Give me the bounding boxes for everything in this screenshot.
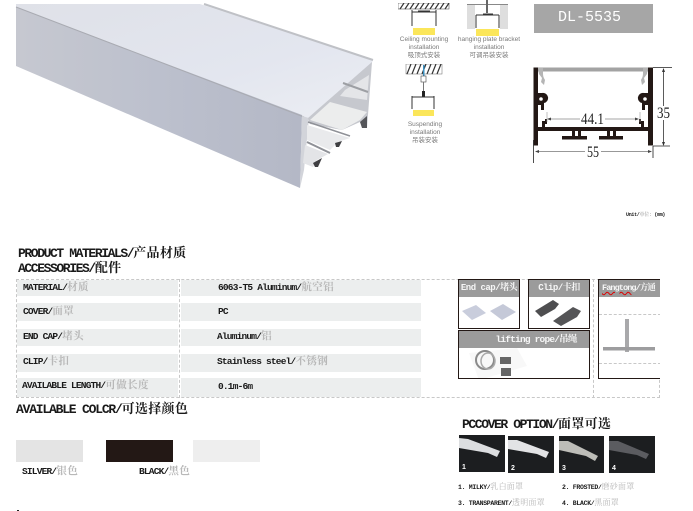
model number badge bbox=[534, 4, 653, 33]
unit note: Unit/单位: (mm) bbox=[626, 212, 665, 218]
accessory: end cap: End cap/堵头 bbox=[461, 283, 517, 293]
swatch: white bbox=[193, 440, 260, 462]
divider between table and accessories bbox=[593, 279, 594, 398]
cover option 3 bbox=[559, 436, 604, 473]
caption: hanging plate bracket installation: installation bbox=[474, 44, 504, 51]
cover option 1 bbox=[459, 435, 505, 472]
row value: cover: PC bbox=[218, 306, 228, 317]
cover option 3: 3 bbox=[562, 465, 566, 472]
heading: accessories: ACCESSORIES/配件 bbox=[18, 261, 121, 276]
icon: suspending installation diagram bbox=[406, 64, 442, 116]
heading: available colour: AVAILABLE COLCR/可选择颜色 bbox=[16, 402, 188, 417]
cover option 1: 1 bbox=[462, 464, 466, 471]
icon: hanging plate bracket diagram bbox=[467, 0, 508, 36]
stray mark bbox=[17, 510, 19, 511]
caption: hanging plate bracket installation: hanging plate bracket bbox=[458, 36, 520, 43]
cross-section dimension drawing: 44.1 bbox=[581, 111, 604, 128]
cover option 4 bbox=[609, 436, 655, 473]
accessory: fangtong bbox=[598, 279, 660, 379]
accessory: clip bbox=[528, 279, 590, 329]
model number badge: DL-5535 bbox=[558, 9, 621, 26]
accessory: fangtong: Fangtong/方通 bbox=[602, 283, 655, 293]
cross-section dimension drawing: 35 bbox=[657, 105, 670, 122]
label: silver: SILVER/银色 bbox=[22, 466, 78, 478]
caption: hanging plate bracket installation bbox=[458, 36, 520, 59]
specification table bbox=[16, 279, 660, 398]
accessory: lifting rope: lifting rope/吊绳 bbox=[495, 334, 577, 345]
row value: available length: 0.1m-6m bbox=[218, 381, 252, 392]
cover option 2: 2 bbox=[511, 465, 515, 472]
label: frosted: 2. FROSTED/磨砂面罩 bbox=[562, 483, 634, 492]
swatch: silver bbox=[16, 440, 83, 462]
cross-section dimension drawing: 55 bbox=[587, 144, 599, 161]
row: material: MATERIAL/材质 bbox=[23, 282, 89, 294]
row: clip: CLIP/卡扣 bbox=[23, 356, 69, 368]
caption: hanging plate bracket installation: 可调吊装安装 bbox=[470, 52, 508, 59]
label: milky: 1. MILKY/乳白面罩 bbox=[458, 483, 523, 492]
accessory: clip: Clip/卡扣 bbox=[538, 283, 580, 293]
accessory: end cap bbox=[458, 279, 520, 329]
row: cover: COVER/面罩 bbox=[23, 306, 74, 318]
caption: ceiling mounting installation: installation bbox=[409, 44, 439, 51]
cross-section dimension drawing bbox=[533, 67, 672, 163]
cover option 4: 4 bbox=[612, 465, 616, 472]
row value: material: 6063-T5 Aluminum/航空铝 bbox=[218, 282, 334, 294]
swatch: black bbox=[106, 440, 173, 462]
caption: suspending installation: 吊装安装 bbox=[412, 137, 438, 144]
caption: suspending installation: Suspending bbox=[408, 121, 442, 128]
label: transparent: 3. TRANSPARENT/透明面罩 bbox=[458, 499, 545, 508]
label: black: BLACK/黑色 bbox=[139, 466, 190, 478]
row: end cap: END CAP/堵头 bbox=[23, 331, 84, 343]
caption: suspending installation: installation bbox=[410, 129, 440, 136]
row value: clip: Stainless steel/不锈钢 bbox=[217, 356, 328, 368]
caption: suspending installation bbox=[408, 121, 442, 144]
row: available length: AVAILABLE LENGTH/可做长度 bbox=[22, 380, 149, 392]
row value: end cap: Aluminum/铝 bbox=[217, 331, 272, 343]
caption: ceiling mounting installation: Ceiling mounting bbox=[400, 36, 448, 43]
cover option 2 bbox=[508, 436, 554, 473]
caption: ceiling mounting installation bbox=[400, 36, 448, 59]
heading: PC cover option: PCCOVER OPTION/面罩可选 bbox=[462, 417, 611, 432]
label: black cover: 4. BLACK/黑面罩 bbox=[562, 499, 619, 508]
heading: product materials: PRODUCT MATERIALS/产品材质 bbox=[18, 246, 186, 261]
product photo: aluminium profile bbox=[16, 3, 374, 188]
caption: ceiling mounting installation: 吸顶式安装 bbox=[408, 52, 440, 59]
icon: ceiling mounting diagram bbox=[398, 3, 450, 35]
accessory: lifting rope bbox=[458, 330, 590, 379]
